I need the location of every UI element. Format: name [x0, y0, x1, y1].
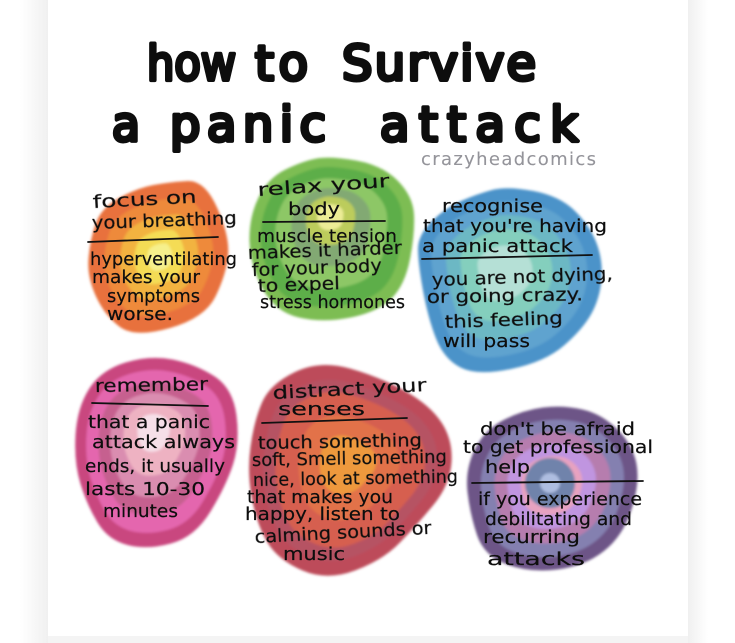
body text: this feeling [444, 308, 563, 333]
green blob [249, 158, 414, 320]
heading: distract your [272, 375, 428, 404]
heading [272, 375, 428, 420]
title: attack [380, 97, 578, 153]
body text: stress hormones [260, 292, 405, 313]
body text: you are not dying, [431, 264, 613, 291]
panel: don't be afraid to get professional help [463, 407, 653, 571]
heading: a panic attack [422, 236, 574, 257]
body text [245, 430, 458, 565]
body text: touch something [258, 430, 422, 454]
heading: recognise [442, 196, 543, 217]
body text: hyperventilating [90, 249, 237, 270]
background shadow: right [688, 0, 708, 643]
body text: that makes you [247, 487, 393, 508]
body text: calming sounds or [254, 518, 433, 548]
body text [90, 249, 237, 325]
title [112, 36, 578, 153]
heading: that you're having [423, 216, 607, 237]
body text: music [283, 544, 345, 565]
body text: symptoms [107, 286, 200, 307]
body text: nice, look at something [253, 466, 458, 491]
bottom edge [48, 636, 688, 643]
panel: relax your body [247, 158, 414, 320]
heading: remember [95, 374, 209, 397]
body text [247, 226, 405, 313]
title: how [147, 36, 236, 92]
body text: soft, Smell something [252, 447, 447, 471]
body text: makes your [92, 267, 201, 288]
panel: distract your senses [245, 365, 458, 576]
body text: debilitating and [485, 509, 632, 530]
heading: senses [278, 399, 365, 420]
credit: crazyheadcomics: crazyheadcomics [421, 149, 596, 170]
orange blob [88, 181, 228, 333]
pink blob [75, 358, 238, 547]
panel: remember [75, 358, 238, 547]
heading: focus on [92, 187, 197, 213]
heading: your breathing [91, 208, 237, 234]
body text [427, 264, 613, 352]
body text: for your body [251, 255, 382, 281]
heading [463, 419, 653, 478]
heading [91, 187, 237, 234]
heading: don't be afraid [480, 419, 635, 440]
title: a [112, 97, 140, 153]
heading: help [485, 457, 530, 478]
body text: happy, listen to [245, 504, 400, 525]
body text [85, 412, 235, 522]
body text: attacks [487, 549, 585, 570]
title: Survive [342, 36, 536, 92]
body text: ends, it usually [85, 456, 225, 477]
body text: muscle tension [257, 226, 397, 247]
purple blob [467, 407, 638, 571]
heading: relax your [257, 171, 391, 201]
heading: body [288, 199, 340, 220]
body text: minutes [103, 501, 178, 522]
title: panic [170, 97, 326, 153]
blue blob [418, 188, 602, 372]
body text: lasts 10-30 [85, 479, 205, 500]
background shadow: left [20, 0, 48, 643]
body text: attack always [92, 432, 235, 453]
heading [422, 196, 607, 257]
body text: recurring [483, 527, 580, 548]
body text: to expel [257, 273, 340, 297]
heading [257, 171, 391, 220]
body text [478, 489, 642, 570]
body text: worse. [107, 304, 173, 325]
heading: to get professional [463, 437, 653, 458]
red blob [249, 365, 452, 576]
panel: recognise that you're having a panic attack [418, 188, 613, 372]
body text: or going crazy. [427, 284, 583, 308]
body text: makes it harder [247, 238, 403, 264]
title: to [255, 36, 308, 92]
body text: that a panic [88, 412, 210, 433]
body text: if you experience [478, 489, 642, 510]
body text: will pass [443, 331, 530, 352]
panel: focus on your breathing [88, 181, 237, 333]
